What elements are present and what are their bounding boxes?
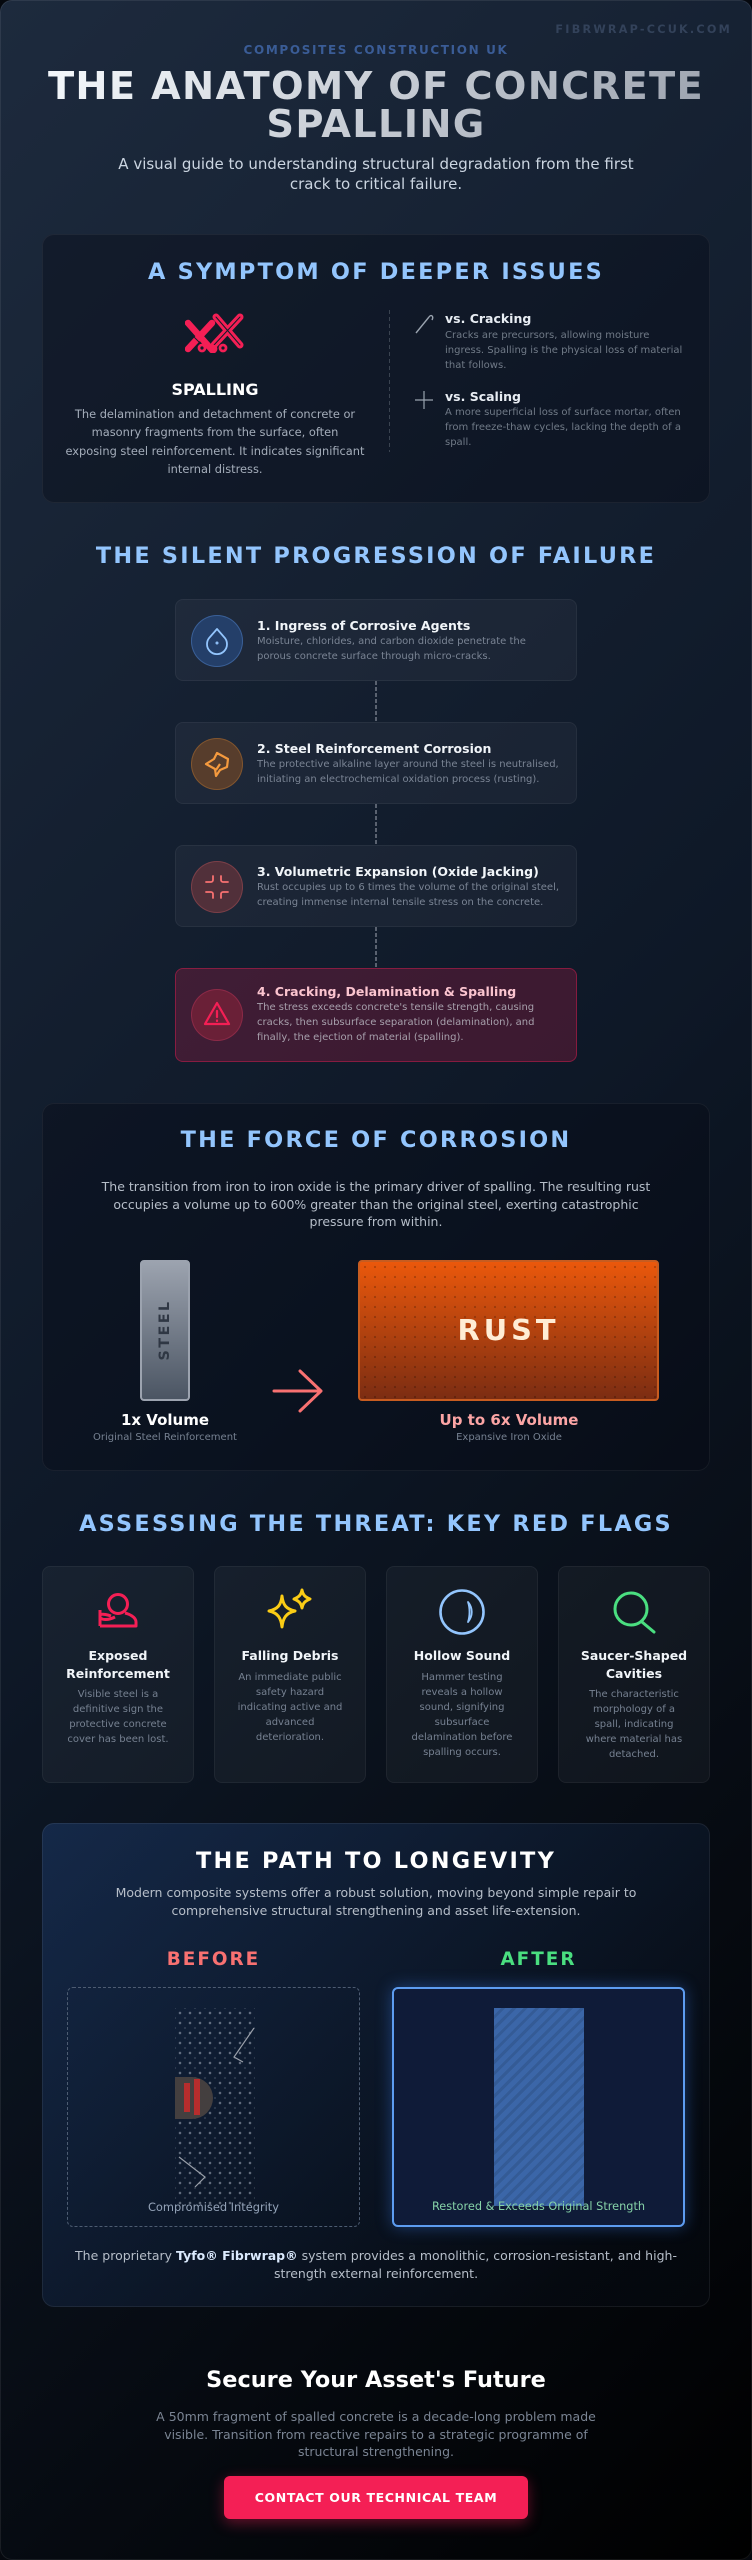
step 3 [175, 845, 577, 927]
step 4 text: The stress exceeds concrete's tensile strength, causing [257, 1002, 534, 1013]
card text: spall, indicating [595, 1718, 673, 1730]
icon: compression arrows [191, 861, 243, 913]
wrapped column [494, 2008, 584, 2206]
spall cavity [175, 2077, 213, 2119]
step 1 title: 1. Ingress of Corrosive Agents [257, 618, 470, 633]
intro text: Modern composite systems offer a robust solution, moving beyond simple repair to [116, 1885, 636, 1900]
rust label: RUST [458, 1313, 559, 1347]
connector 3 [375, 927, 377, 968]
card row: red flags [42, 1566, 710, 1783]
caption: restored: Restored & Exceeds Original Strength [432, 2200, 645, 2213]
step 4 [175, 968, 577, 1062]
intro text: comprehensive structural strengthening and asset life-extension. [172, 1903, 580, 1918]
icon: corrosion spark [191, 738, 243, 790]
comparison text: cracking: Cracks are precursors, allowing moisture [445, 330, 649, 340]
panel: a symptom of deeper issues [42, 234, 710, 503]
card text: morphology of a [593, 1704, 675, 1714]
heading: force: THE FORCE OF CORROSION [181, 1127, 571, 1153]
card title: Falling Debris [242, 1648, 338, 1663]
title: SPALLING [266, 102, 486, 147]
label: spalling: SPALLING [171, 380, 259, 399]
comparison text: scaling: A more superficial loss of surface mortar, often [445, 406, 681, 418]
panel: force of corrosion [42, 1103, 710, 1471]
before diagram [67, 1987, 360, 2227]
heading: red flags: ASSESSING THE THREAT: KEY RED FLAGS [79, 1511, 673, 1537]
caption: steel description: Original Steel Reinforcement [93, 1432, 237, 1443]
caption: rust description: Expansive Iron Oxide [456, 1432, 562, 1443]
card text: subsurface [435, 1716, 489, 1728]
card text: spalling occurs. [423, 1746, 501, 1758]
card title: Exposed [88, 1648, 148, 1663]
card: exposed reinforcement [42, 1566, 194, 1783]
subtitle: crack to critical failure. [290, 175, 462, 193]
icon: scaling plus [415, 391, 433, 409]
card title: Cavities [606, 1666, 662, 1681]
card text: advanced [266, 1716, 314, 1728]
exposed rebar [194, 2079, 200, 2115]
website label: FIBRWRAP-CCUK.COM [555, 23, 732, 36]
step 2 text: initiating an electrochemical oxidation process (rusting). [257, 774, 539, 785]
card: hollow sound [386, 1566, 538, 1783]
exposed rebar [184, 2083, 190, 2112]
damaged concrete column [175, 2008, 255, 2206]
connector 1 [375, 681, 377, 722]
comparison text: cracking [445, 330, 682, 370]
comparison text: cracking: that follows. [445, 360, 506, 370]
intro text: pressure from within. [310, 1214, 442, 1229]
caption: steel volume: 1x Volume [121, 1411, 209, 1429]
CTA text: structural strengthening. [298, 2444, 454, 2459]
step 4 title: 4. Cracking, Delamination & Spalling [257, 984, 516, 999]
card text [67, 1688, 169, 1744]
step 4 text: cracks, then subsurface separation (delamination), and [257, 1017, 534, 1028]
icon: warning triangle [191, 989, 243, 1041]
after diagram [392, 1987, 685, 2227]
call to action [156, 2367, 596, 2532]
definition text: masonry fragments from the surface, often [92, 425, 338, 439]
card title: Saucer-Shaped [581, 1648, 687, 1663]
card text: The characteristic [589, 1688, 679, 1700]
steel label: STEEL [157, 1300, 173, 1361]
icon: hollow ring [439, 1589, 485, 1635]
intro text: occupies a volume up to 600% greater than the original steel, exerting catastrophic [113, 1197, 639, 1212]
card text: where material has [586, 1734, 682, 1744]
icon: crack needle [416, 314, 434, 334]
intro text [116, 1885, 636, 1918]
step 2 [175, 722, 577, 804]
comparison text: scaling: spall. [445, 436, 471, 448]
icon: sparkles [268, 1588, 312, 1628]
card text: safety hazard [256, 1686, 324, 1698]
divider [389, 310, 390, 452]
card title [66, 1648, 170, 1681]
step 3 text: Rust occupies up to 6 times the volume of the original steel, [257, 882, 559, 893]
step 4 text: finally, the ejection of material (spalling). [257, 1032, 464, 1043]
crack lines [178, 2028, 254, 2188]
label: before: BEFORE [167, 1949, 260, 1970]
card text: indicating active and [238, 1702, 342, 1712]
caption: compromised: Compromised Integrity [148, 2200, 279, 2214]
step 3 text: creating immense internal tensile stress on the concrete. [257, 897, 543, 908]
step 1 text: Moisture, chlorides, and carbon dioxide penetrate the [257, 636, 526, 647]
heading: longevity: THE PATH TO LONGEVITY [196, 1848, 556, 1874]
flow: four failure stages [175, 599, 577, 1062]
card text: deterioration. [256, 1732, 324, 1742]
comparison text: scaling: from freeze-thaw cycles, lacking the depth of a [445, 422, 681, 432]
label: after: AFTER [500, 1949, 577, 1970]
heading: symptom: A SYMPTOM OF DEEPER ISSUES [148, 259, 604, 285]
title: THE ANATOMY OF CONCRETE [48, 64, 704, 109]
card text [238, 1672, 342, 1742]
step 1 text [257, 636, 526, 662]
CTA text: visible. Transition from reactive repairs to a strategic programme of [164, 2427, 588, 2442]
card text: An immediate public [238, 1672, 342, 1682]
icon: exposed bar [98, 1593, 138, 1628]
card title: Reinforcement [66, 1666, 170, 1681]
card text: sound, signifying [420, 1702, 504, 1712]
CTA button [224, 2476, 528, 2519]
definition text [66, 407, 364, 476]
CTA button: CONTACT OUR TECHNICAL TEAM [255, 2490, 497, 2505]
card text: definitive sign the [73, 1704, 163, 1714]
panel: path to longevity [42, 1823, 710, 2307]
comparison text: scaling [445, 406, 681, 448]
CTA text [156, 2409, 596, 2459]
connector 2 [375, 804, 377, 845]
step 2 title: 2. Steel Reinforcement Corrosion [257, 741, 491, 756]
step 1 [175, 599, 577, 681]
subtitle [118, 155, 634, 193]
definition text: The delamination and detachment of concrete or [75, 407, 355, 421]
step 4 text [257, 1002, 534, 1043]
step 3 text [257, 882, 559, 908]
step 2 text [257, 759, 559, 785]
card text [586, 1688, 682, 1760]
comparison: vs scaling: vs. Scaling [445, 389, 521, 404]
comparison text: cracking: ingress. Spalling is the physical loss of material [445, 344, 682, 356]
card text: delamination before [412, 1732, 512, 1742]
closing text: strength external reinforcement. [274, 2266, 478, 2281]
step 3 title: 3. Volumetric Expansion (Oxide Jacking) [257, 864, 539, 879]
closing text: The proprietary Tyfo® Fibrwrap® system provides a monolithic, corrosion-resistant, and high- [75, 2248, 677, 2263]
arrow: steel to rust [272, 1369, 323, 1413]
card text: protective concrete [69, 1718, 167, 1730]
card text: Hammer testing [421, 1672, 503, 1682]
card: falling debris [214, 1566, 366, 1783]
closing text [74, 2248, 677, 2281]
subtitle: A visual guide to understanding structural degradation from the first [118, 155, 634, 173]
card text: Visible steel is a [78, 1688, 158, 1700]
steel bar [140, 1260, 190, 1401]
step 1 text: porous concrete surface through micro-cracks. [257, 651, 491, 662]
card text [412, 1672, 512, 1758]
CTA heading: Secure Your Asset's Future [206, 2367, 546, 2393]
organisation eyebrow: COMPOSITES CONSTRUCTION UK [244, 43, 508, 57]
comparison: vs cracking: vs. Cracking [445, 311, 531, 326]
icon: magnifier [614, 1592, 656, 1634]
CTA text: A 50mm fragment of spalled concrete is a decade-long problem made [156, 2409, 596, 2424]
card title: Hollow Sound [414, 1648, 510, 1663]
card text: detached. [609, 1748, 659, 1760]
card: saucer-shaped cavities [558, 1566, 710, 1783]
caption: rust volume: Up to 6x Volume [440, 1411, 578, 1429]
icon: water drop [191, 615, 243, 667]
intro text: The transition from iron to iron oxide is the primary driver of spalling. The resulting rust [102, 1179, 650, 1194]
intro text [102, 1179, 650, 1229]
heading: progression: THE SILENT PROGRESSION OF FAILURE [96, 543, 656, 569]
card text: cover has been lost. [67, 1734, 169, 1744]
step 2 text: The protective alkaline layer around the steel is neutralised, [257, 759, 559, 770]
icon: spalling crossed fragments [185, 314, 244, 353]
card text: reveals a hollow [421, 1686, 503, 1698]
definition text: internal distress. [167, 462, 263, 476]
rust block [358, 1260, 659, 1401]
card title [581, 1648, 687, 1681]
definition text: exposing steel reinforcement. It indicates significant [66, 444, 364, 458]
title [0, 68, 752, 144]
